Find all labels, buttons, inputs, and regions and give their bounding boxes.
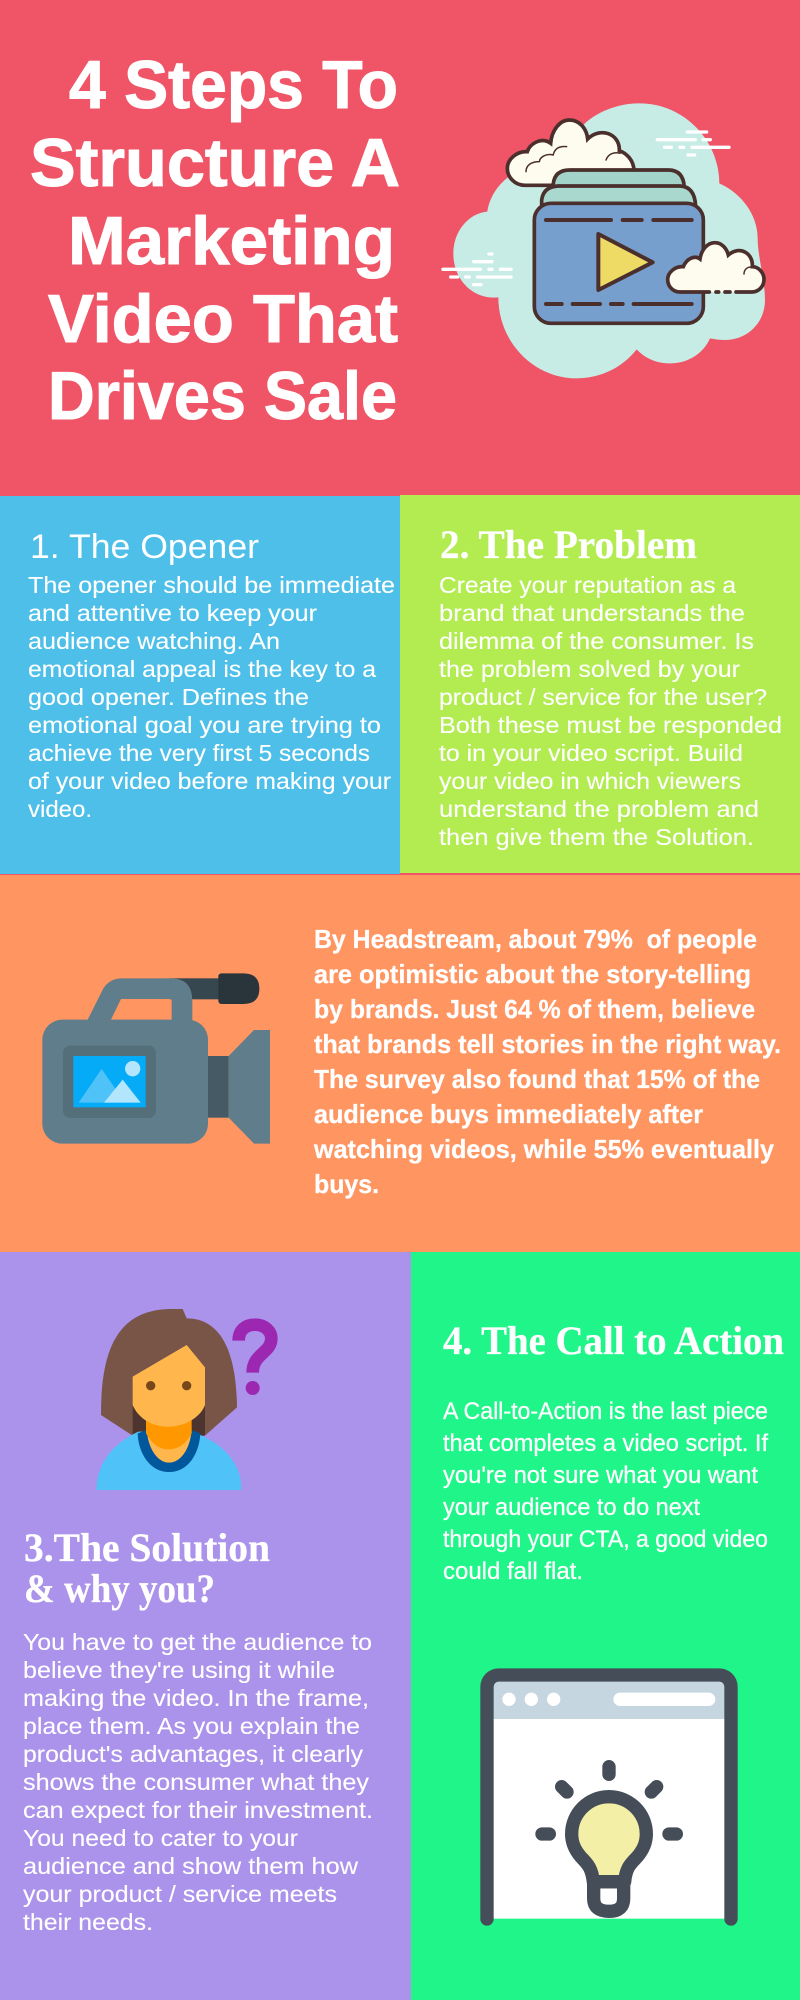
text: opener body: emotional appeal is the key to a	[28, 656, 376, 682]
text: call to action body: A Call-to-Action is the last piece	[443, 1398, 768, 1425]
text: opener body: audience watching. An	[28, 628, 280, 654]
panel: step 2 the problem	[400, 495, 800, 873]
title	[30, 47, 400, 434]
icon: video camera	[42, 973, 270, 1144]
title: 4 Steps To	[69, 47, 398, 123]
text: solution body: their needs.	[23, 1909, 153, 1935]
icon: person with question mark	[96, 1309, 271, 1490]
text: problem body: the problem solved by your	[439, 656, 740, 682]
text: problem body: then give them the Solution.	[439, 824, 754, 850]
text: problem body: understand the problem and	[439, 796, 759, 822]
text: opener body: emotional goal you are trying to	[28, 712, 381, 738]
text: problem body: brand that understands the	[439, 600, 745, 626]
text: call to action body: your audience to do next	[443, 1494, 700, 1521]
text: headstream statistics: By Headstream, about 79% of people	[314, 924, 757, 954]
title: Drives Sale	[48, 358, 397, 434]
text: solution body: your product / service meets	[23, 1881, 337, 1907]
text: problem body: dilemma of the consumer. Is	[439, 628, 754, 654]
text: opener body: good opener. Defines the	[28, 684, 309, 710]
text: headstream statistics: by brands. Just 64 % of them, believe	[314, 994, 755, 1024]
icon: video player in clouds	[443, 103, 765, 378]
heading: 3. The Solution & why you?	[24, 1525, 270, 1611]
text: solution body: place them. As you explain the	[23, 1713, 360, 1739]
text: solution body: audience and show them how	[23, 1853, 358, 1879]
text: headstream statistics: The survey also found that 15% of the	[314, 1064, 760, 1094]
panel: header	[0, 0, 800, 497]
heading: 3. The Solution & why you?: 3.The Solution	[24, 1525, 270, 1570]
text: solution body: can expect for their investment.	[23, 1797, 373, 1823]
panel: statistics	[0, 875, 800, 1253]
text: problem body: product / service for the user?	[439, 684, 767, 710]
text: headstream statistics: that brands tell stories in the right way.	[314, 1029, 781, 1059]
text: opener body: video.	[28, 796, 92, 822]
text: opener body: The opener should be immediate	[28, 572, 395, 598]
text: call to action body: you're not sure what you want	[443, 1462, 758, 1489]
heading: 3. The Solution & why you?: & why you?	[24, 1566, 215, 1611]
text: solution body: believe they're using it while	[23, 1657, 335, 1683]
text: opener body: of your video before making your	[28, 768, 391, 794]
text: problem body	[439, 572, 782, 850]
heading: 4. The Call to Action: 4. The Call to Action	[443, 1318, 784, 1363]
heading: 1. The Opener: 1. The Opener	[30, 528, 259, 566]
title: Marketing	[68, 203, 395, 279]
text: opener body: and attentive to keep your	[28, 600, 317, 626]
text: headstream statistics	[313, 924, 781, 1199]
text: headstream statistics: audience buys immediately after	[314, 1099, 703, 1129]
text: call to action body: could fall flat.	[443, 1558, 583, 1585]
text: headstream statistics: watching videos, while 55% eventually	[313, 1134, 775, 1164]
text: headstream statistics: buys.	[314, 1169, 379, 1199]
text: problem body: your video in which viewers	[439, 768, 741, 794]
text: call to action body: through your CTA, a good video	[443, 1526, 768, 1553]
text: solution body: shows the consumer what they	[23, 1769, 370, 1795]
text: solution body: You have to get the audience to	[23, 1629, 372, 1655]
title: Structure A	[30, 125, 400, 201]
text: problem body: to in your video script. Build	[439, 740, 743, 766]
title: Video That	[48, 281, 398, 357]
text: solution body: You need to cater to your	[23, 1825, 298, 1851]
text: solution body: making the video. In the frame,	[23, 1685, 369, 1711]
text: opener body: achieve the very first 5 seconds	[28, 740, 370, 766]
text: solution body	[23, 1629, 373, 1935]
icon: browser window with light bulb	[487, 1675, 731, 1919]
text: problem body: Both these must be responded	[439, 712, 782, 738]
panel: step 1 the opener	[0, 496, 400, 874]
heading: 2. The Problem: 2. The Problem	[440, 522, 697, 567]
text: headstream statistics: are optimistic about the story-telling	[314, 959, 751, 989]
panel: step 4 the call to action	[411, 1252, 800, 2000]
text: call to action body	[443, 1398, 768, 1585]
text: solution body: product's advantages, it clearly	[23, 1741, 364, 1767]
panel: step 3 the solution	[0, 1252, 411, 2000]
text: opener body	[28, 572, 395, 822]
text: call to action body: that completes a video script. If	[443, 1430, 768, 1457]
text: problem body: Create your reputation as a	[439, 572, 736, 598]
